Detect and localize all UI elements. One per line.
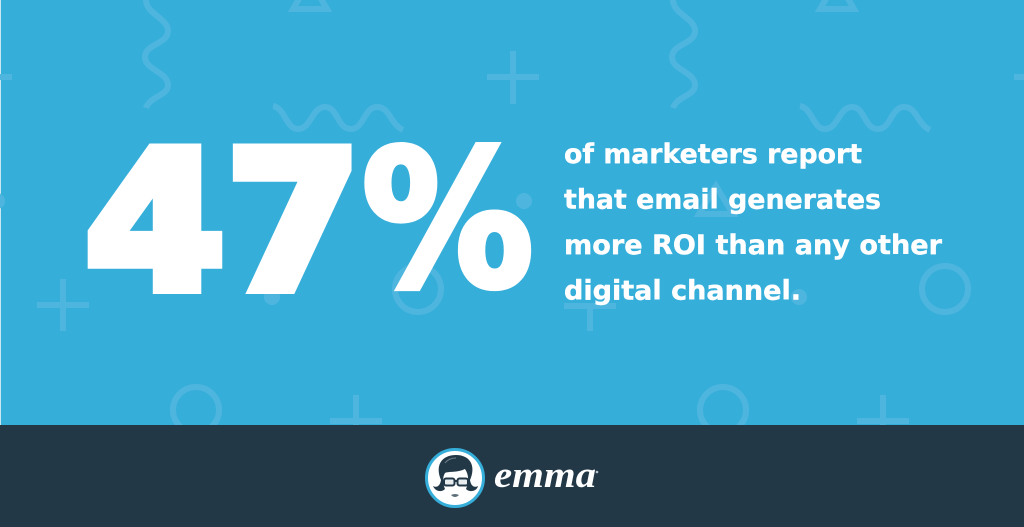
description text xyxy=(564,139,943,306)
description text: of marketers report xyxy=(564,139,862,170)
big statistic: 47%: % xyxy=(362,111,533,330)
description text: more ROI than any other xyxy=(564,230,943,261)
big statistic: 47%: 7 xyxy=(226,113,361,334)
logo wordmark: emma xyxy=(494,455,596,496)
description text: digital channel. xyxy=(564,276,801,306)
icon: emma logo face xyxy=(426,450,484,506)
description text: that email generates xyxy=(564,184,881,216)
big statistic: 47%: 4 xyxy=(85,112,225,334)
footer bar xyxy=(0,425,1024,527)
registered mark xyxy=(596,471,598,473)
big statistic: 47% xyxy=(85,111,533,334)
